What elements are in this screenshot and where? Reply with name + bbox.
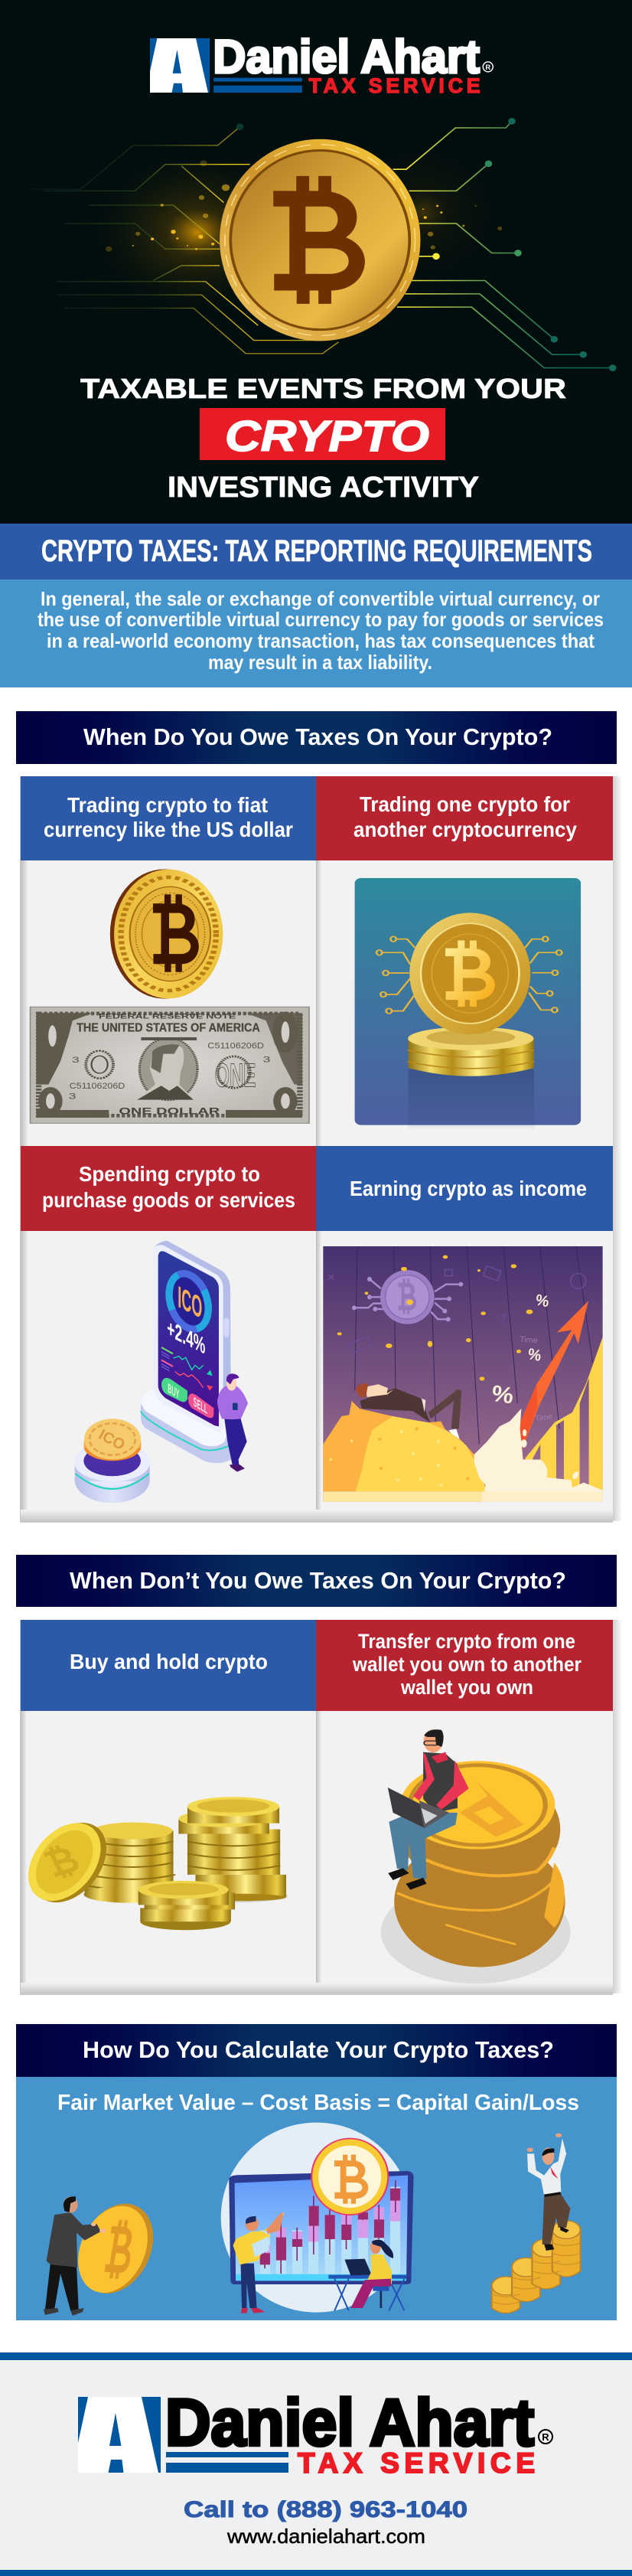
illustration: gold coin stacks — [15, 1797, 288, 1930]
title: INVESTING ACTIVITY — [168, 472, 479, 504]
illustration: one dollar bill: ONE DOLLAR — [119, 1107, 220, 1117]
logo: Daniel Ahart Tax Service footer — [78, 2386, 552, 2479]
illustration: man resting on gold: Time — [534, 1412, 553, 1424]
card header: trading one crypto: another cryptocurrency — [353, 818, 577, 841]
illustration: one dollar bill: C51106206D — [70, 1081, 125, 1091]
card header: earning crypto: Earning crypto as income — [350, 1177, 587, 1200]
illustration: ICO phone and coin: +2.4% — [167, 1314, 205, 1360]
text block: intro — [37, 587, 604, 674]
heading: how do you calculate — [16, 2024, 617, 2077]
icon: bitcoin coin — [220, 139, 420, 341]
card header: transfer crypto: wallet you own to another — [352, 1653, 582, 1676]
heading: how do you calculate: How Do You Calculate Your Crypto Taxes? — [83, 2036, 554, 2063]
card header: trading to fiat: currency like the US dollar — [44, 818, 293, 841]
panel: when you owe grid — [20, 776, 622, 1523]
heading: when don't you owe — [16, 1555, 617, 1607]
illustration: man resting on gold: % — [526, 1345, 542, 1365]
phone number: Call to (888) 963-1040 — [184, 2497, 467, 2522]
card header: buy and hold — [21, 1620, 316, 1711]
illustration: circuit bitcoin coin — [32, 118, 616, 371]
figure: reclining man — [356, 1383, 461, 1441]
panel: footer — [0, 2352, 632, 2576]
illustration: man resting on gold: Time — [520, 1335, 538, 1346]
logo: Daniel Ahart Tax Service top: Daniel Ahart — [213, 31, 480, 83]
card header: transfer crypto — [316, 1620, 613, 1711]
illustration: one dollar bill — [31, 1007, 309, 1123]
logo: Daniel Ahart Tax Service footer: R — [542, 2431, 549, 2443]
illustration: ICO phone and coin: ICO — [178, 1279, 202, 1325]
illustration: one dollar bill: 3 — [262, 1054, 270, 1064]
title: TAXABLE EVENTS FROM YOUR — [80, 373, 566, 404]
illustration: one dollar bill: THE UNITED STATES OF AMERICA — [77, 1021, 260, 1034]
card header: transfer crypto: wallet you own — [400, 1676, 533, 1699]
website: www.danielahart.com — [226, 2525, 425, 2548]
heading: when do you owe: When Do You Owe Taxes On Your Crypto? — [83, 723, 552, 750]
illustration: ICO phone and coin: BUY — [168, 1381, 180, 1402]
title — [80, 373, 566, 504]
icon: gold bitcoin — [110, 869, 223, 999]
illustration: man with laptop on coin stack — [381, 1729, 570, 1983]
card header: spending crypto — [21, 1146, 316, 1231]
logo: Daniel Ahart Tax Service footer: Daniel Ahart — [165, 2386, 534, 2460]
card header: trading one crypto: Trading one crypto for — [360, 792, 570, 816]
illustration: ICO phone and coin: ICO — [96, 1426, 128, 1454]
card header: earning crypto — [316, 1146, 613, 1231]
heading: when do you owe — [16, 711, 617, 764]
illustration: man resting on gold: % — [534, 1291, 550, 1311]
panel: calculate — [16, 2077, 617, 2320]
illustration: one dollar bill: ONE — [215, 1057, 256, 1094]
heading: when don't you owe: When Don’t You Owe Taxes On Your Crypto? — [70, 1567, 566, 1594]
figure: man with phone — [217, 1373, 248, 1472]
logo: Daniel Ahart Tax Service top: R — [485, 64, 490, 71]
figure: analyst pointing — [233, 2212, 284, 2313]
card header: trading one crypto — [316, 776, 613, 860]
illustration: one dollar bill: 3 — [72, 1055, 80, 1065]
text block: intro: may result in a tax liability. — [208, 651, 432, 674]
panel: hero — [0, 0, 632, 524]
illustration: one dollar bill: 3 — [69, 1091, 77, 1101]
icon: lilac bitcoin circuit — [352, 1270, 463, 1324]
illustration: coin on stack card — [355, 878, 581, 1131]
logo: Daniel Ahart Tax Service top: TAX SERVICE — [309, 74, 481, 97]
illustration: man rolling coin — [44, 2196, 164, 2316]
panel: tax reporting requirements — [0, 524, 632, 687]
illustration: ICO phone and coin: SELL — [194, 1394, 207, 1417]
card header: buy and hold: Buy and hold crypto — [70, 1650, 268, 1673]
card header: trading to fiat: Trading crypto to fiat — [67, 793, 268, 817]
logo: Daniel Ahart Tax Service footer: TAX SERVICE — [298, 2447, 535, 2479]
title: CRYPTO — [225, 412, 429, 461]
figure: woman at desk — [328, 2240, 406, 2310]
card header: trading to fiat — [21, 776, 316, 860]
logo: Daniel Ahart Tax Service top — [150, 31, 493, 97]
illustration: ICO phone and coin — [75, 1241, 248, 1503]
illustration: candlestick monitor with analysts — [221, 2123, 413, 2313]
illustration: one dollar bill: C51106206D — [207, 1040, 264, 1050]
illustration: man on rising coin stacks — [492, 2134, 581, 2313]
illustration: man resting on gold — [323, 1246, 603, 1502]
illustration: one dollar bill: FEDERAL RESERVE NOTE — [99, 1012, 236, 1020]
card header: transfer crypto: Transfer crypto from one — [358, 1630, 575, 1653]
panel: when you don't owe grid — [15, 1620, 622, 1995]
formula: Fair Market Value – Cost Basis = Capital Gain/Loss — [57, 2091, 579, 2115]
card header: spending crypto: Spending crypto to — [79, 1162, 260, 1186]
illustration: man resting on gold: % — [490, 1381, 515, 1409]
card header: spending crypto: purchase goods or services — [42, 1188, 295, 1212]
